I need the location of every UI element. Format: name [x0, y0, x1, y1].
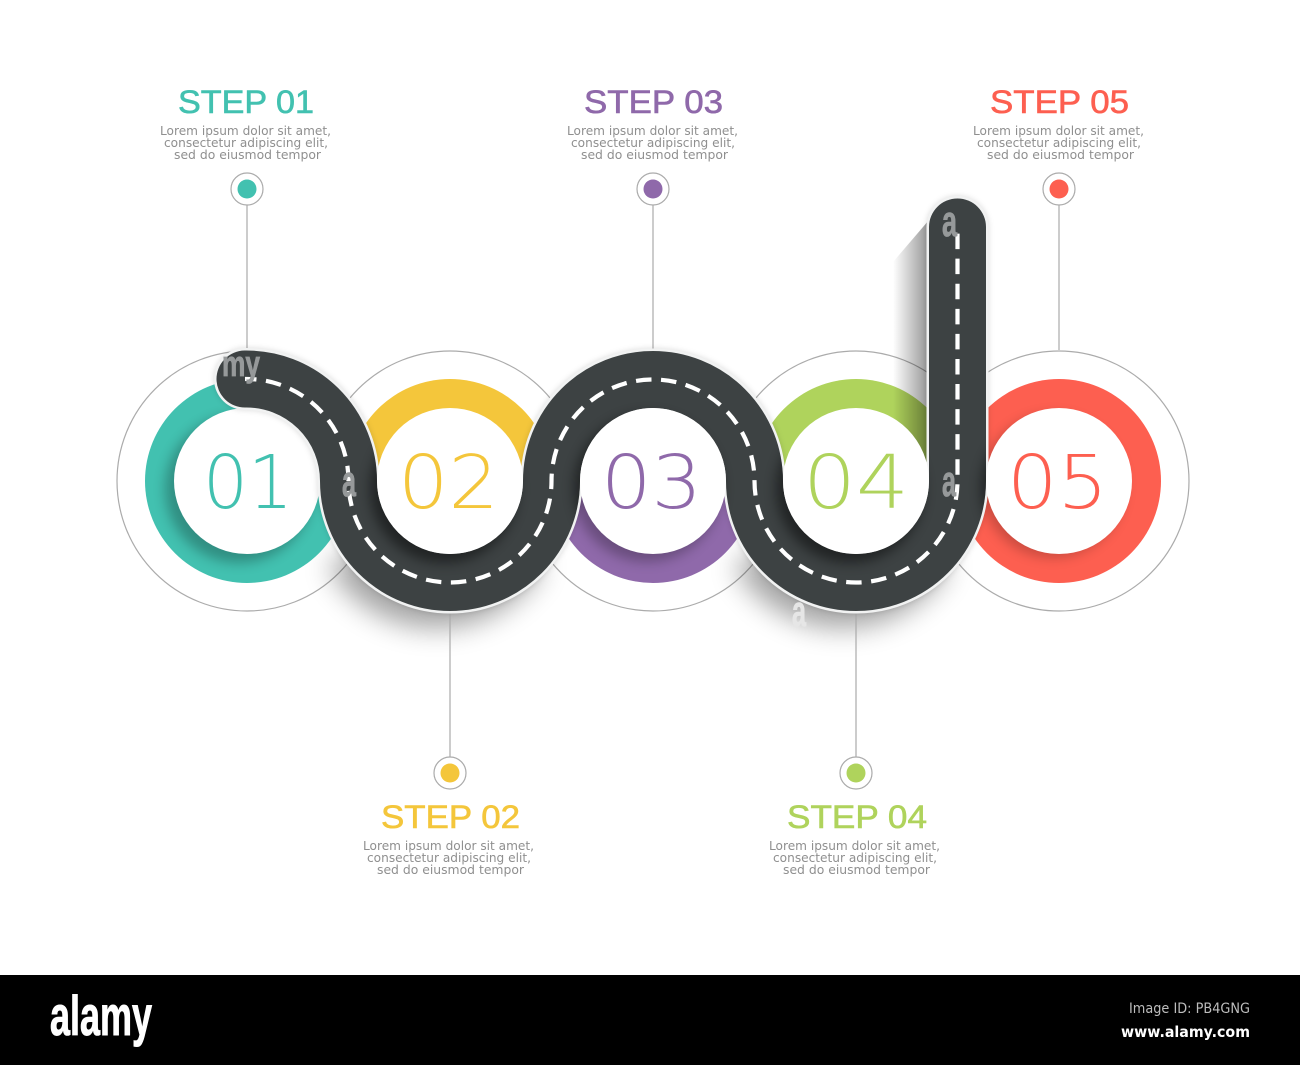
watermark fragments [222, 197, 957, 636]
watermark fragments: a [942, 197, 957, 246]
step 02 callout [363, 757, 534, 877]
ring 05 inner shadow [981, 414, 1125, 558]
numbers [203, 440, 1108, 526]
step 03 text: sed do eiusmod tempor [581, 148, 728, 162]
image id: Image ID: PB4GNG [1129, 1001, 1250, 1017]
road soft edge shadow [245, 227, 958, 582]
step 04 text [769, 839, 940, 877]
coloured rings [145, 379, 1161, 583]
step 03 text: Lorem ipsum dolor sit amet, [567, 124, 738, 138]
step 04 heading: STEP 04 [787, 799, 927, 835]
footer logo: alamy [50, 984, 152, 1047]
step 03 marker [637, 173, 669, 205]
numbers: 03 [601, 440, 702, 526]
step 03 text: consectetur adipiscing elit, [571, 136, 735, 150]
step 04 text: sed do eiusmod tempor [783, 863, 930, 877]
step 04 text: consectetur adipiscing elit, [773, 851, 937, 865]
step 04 text: Lorem ipsum dolor sit amet, [769, 839, 940, 853]
road drop shadow [348, 554, 930, 605]
step 01 text: sed do eiusmod tempor [174, 148, 321, 162]
step 05 marker [1043, 173, 1075, 205]
connector lines [247, 205, 1059, 757]
watermark fragments: a [942, 457, 956, 506]
step 05 callout [973, 84, 1144, 205]
number discs [377, 408, 1132, 554]
step 04 marker [840, 757, 872, 789]
step 02 text: sed do eiusmod tempor [377, 863, 524, 877]
step 03 callout [567, 84, 738, 205]
step 05 text [973, 124, 1144, 162]
numbers: 04 [803, 440, 909, 526]
road centre dashes [245, 227, 958, 582]
step 02 marker [434, 757, 466, 789]
step 01 heading: STEP 01 [178, 84, 314, 120]
step 01 marker [231, 173, 263, 205]
step 01 text: Lorem ipsum dolor sit amet, [160, 124, 331, 138]
watermark fragments: a [792, 587, 806, 636]
road [245, 227, 958, 582]
ring inner shadows [165, 414, 721, 563]
step 03 heading: STEP 03 [584, 84, 723, 120]
website: www.alamy.com [1121, 1023, 1250, 1041]
step 05 text: sed do eiusmod tempor [987, 148, 1134, 162]
step 01 text [160, 124, 331, 162]
number disc shadows on road [366, 417, 986, 566]
step 02 text: consectetur adipiscing elit, [367, 851, 531, 865]
watermark fragments: my [222, 343, 260, 384]
road surface [245, 227, 958, 582]
step 02 text [363, 839, 534, 877]
step 04 callout [769, 757, 940, 877]
step 01 callout [160, 84, 331, 205]
watermark fragments: a [342, 457, 356, 506]
numbers: 05 [1007, 440, 1108, 526]
step 05 text: consectetur adipiscing elit, [977, 136, 1141, 150]
step 02 text: Lorem ipsum dolor sit amet, [363, 839, 534, 853]
footer bar [0, 975, 1300, 1065]
step 05 text: Lorem ipsum dolor sit amet, [973, 124, 1144, 138]
step 05 heading: STEP 05 [990, 84, 1129, 120]
numbers: 02 [398, 440, 499, 526]
road white edge [245, 227, 958, 582]
long shadow of vertical road [893, 220, 929, 480]
numbers: 01 [203, 440, 293, 526]
outer circle outlines [117, 351, 1189, 611]
number disc 01 [174, 408, 320, 554]
step 01 text: consectetur adipiscing elit, [164, 136, 328, 150]
step 02 heading: STEP 02 [381, 799, 520, 835]
step 03 text [567, 124, 738, 162]
